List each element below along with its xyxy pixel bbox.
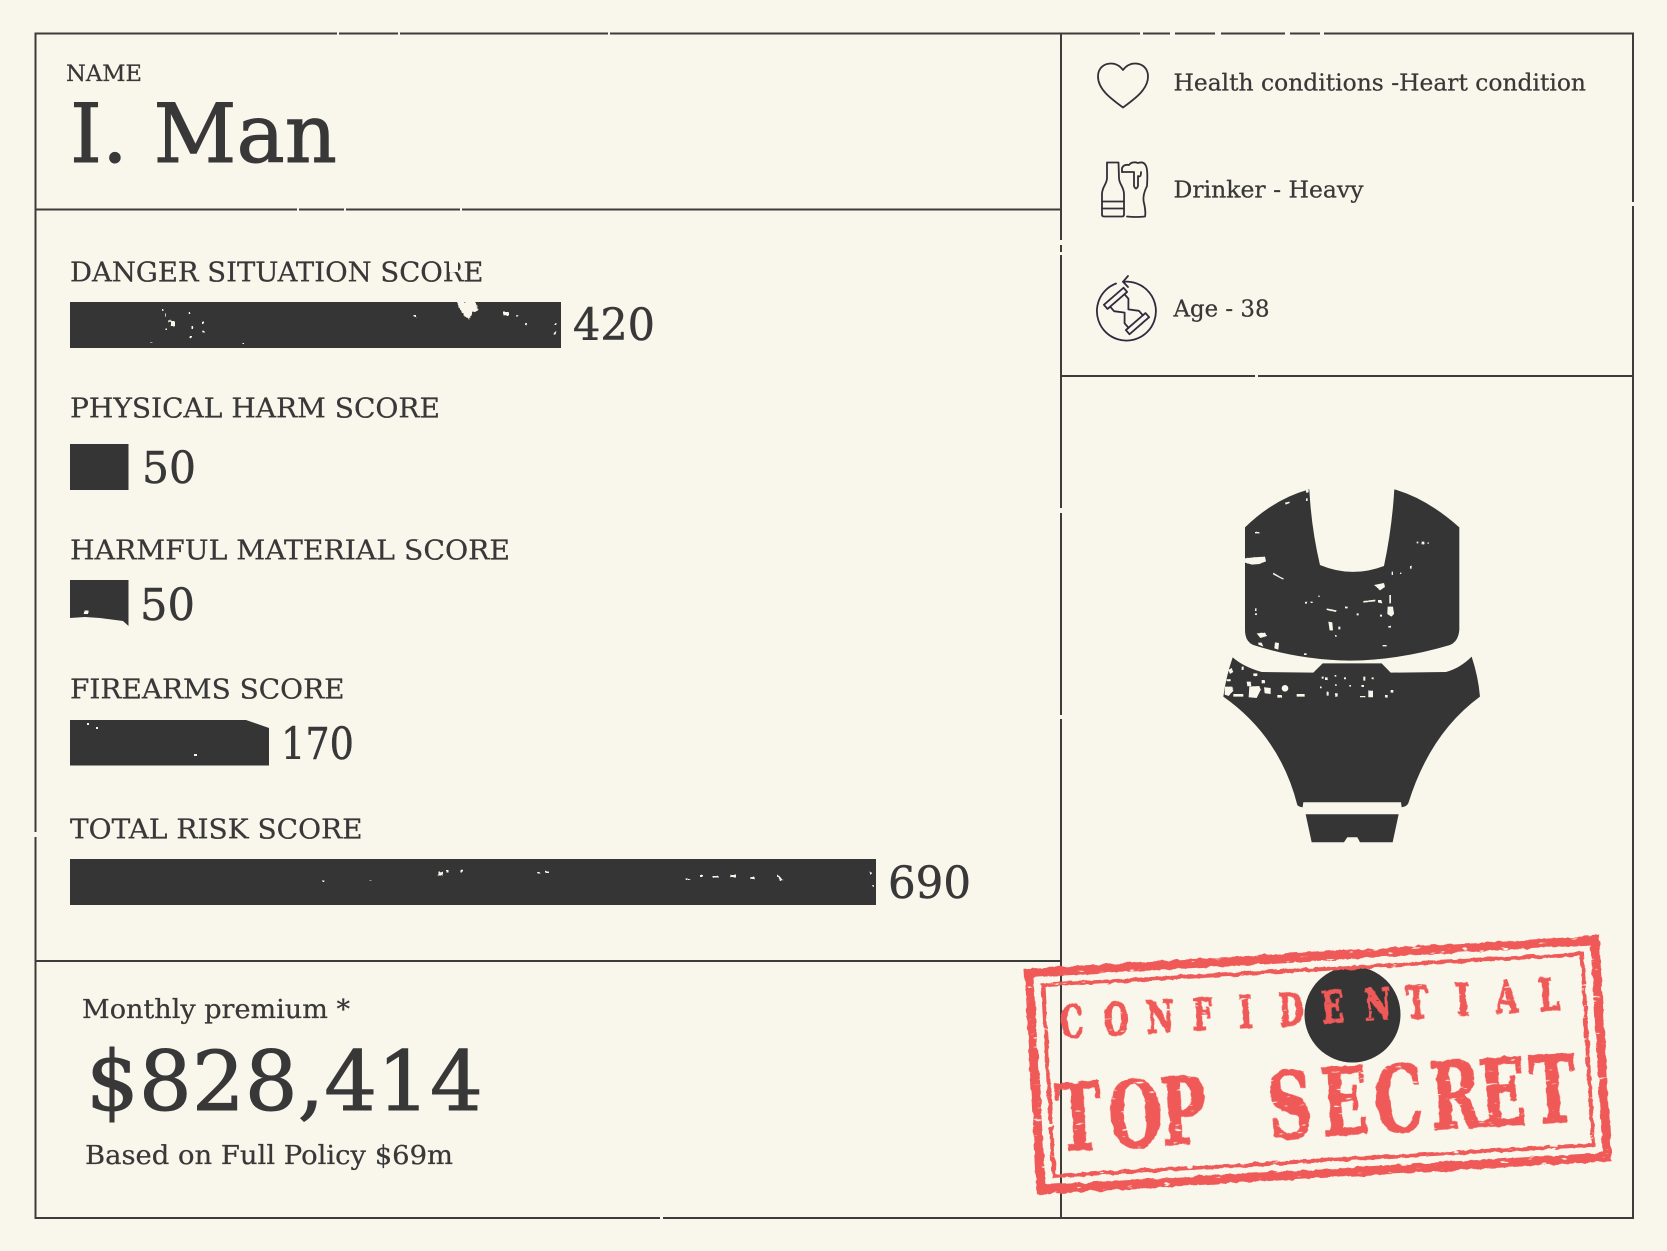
heading: person name: I. Man [70, 88, 337, 182]
score row: danger situation [70, 258, 655, 351]
text: health conditions: Health conditions -Heart condition [1174, 70, 1586, 96]
label: monthly premium: Monthly premium * [82, 994, 350, 1025]
icon: black seal dot [1304, 966, 1400, 1062]
score row: firearms [70, 674, 354, 770]
panel: risk scores [36, 210, 1061, 961]
panel: name [36, 34, 1061, 210]
icon: heart [1098, 64, 1148, 108]
panel: monthly premium [36, 961, 1061, 1218]
panel: portrait [1061, 376, 1633, 1218]
icon: iron mask silhouette [1223, 489, 1480, 842]
score row: physical harm: 50 [142, 443, 196, 494]
score row: total risk: TOTAL RISK SCORE [70, 814, 362, 846]
icon: bottle and beer glass [1102, 162, 1147, 217]
text: drinker: Drinker - Heavy [1174, 178, 1364, 204]
score row: harmful material: 50 [140, 580, 195, 631]
stamp text: top secret: TOP SECRET [1053, 1034, 1579, 1174]
score row: danger situation: DANGER SITUATION SCORE [70, 258, 483, 288]
score row: total risk: 690 [888, 858, 971, 909]
note: policy basis: Based on Full Policy $69m [85, 1140, 453, 1171]
score row: danger situation: 420 [573, 300, 655, 351]
score row: total risk [70, 814, 971, 909]
figure: premium amount: $828,414 [86, 1035, 483, 1130]
score row: physical harm: PHYSICAL HARM SCORE [70, 394, 440, 424]
score row: physical harm [70, 394, 440, 494]
panel: personal conditions [1061, 34, 1633, 376]
stamp frame [1029, 940, 1607, 1190]
score row: harmful material [70, 536, 510, 631]
text: age: Age - 38 [1173, 296, 1270, 322]
label: name: NAME [66, 62, 142, 87]
score row: firearms: 170 [281, 719, 354, 770]
stamp text: confidential: CONFIDENTIAL [1059, 968, 1561, 1049]
stamp: confidential top secret [1029, 940, 1607, 1190]
score row: harmful material: HARMFUL MATERIAL SCORE [70, 536, 510, 566]
score row: firearms: FIREARMS SCORE [70, 674, 344, 706]
icon: hourglass in cycle [1097, 276, 1156, 341]
